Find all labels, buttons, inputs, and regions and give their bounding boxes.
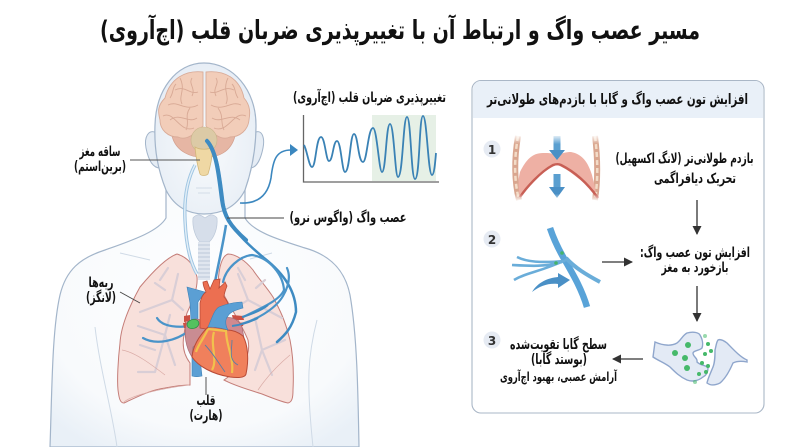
main vagus nerve (143, 140, 296, 342)
step 2 badge (484, 230, 500, 248)
left lung (118, 254, 197, 403)
step 1 text: تحریک دیافراگمی (654, 170, 736, 187)
panel header (473, 81, 763, 118)
step 3 text: آرامش عصبی، بهبود اچ‌آروی (500, 369, 617, 385)
left hemisphere (159, 72, 203, 138)
step 2 badge: 2 (488, 233, 496, 247)
right ear (250, 132, 264, 168)
step 3 text: (بوستد گابا) (531, 350, 587, 368)
midbrain (191, 127, 217, 153)
vagus nerve label: عصب واگ (واگوس نرو) (290, 209, 406, 226)
curved arrow to chart (240, 144, 298, 203)
heart label (190, 377, 222, 424)
step 1 badge (484, 140, 500, 158)
step 3 badge (484, 332, 500, 348)
right hemisphere (206, 72, 250, 138)
step 1 text (616, 150, 754, 187)
brainstem (195, 147, 213, 176)
highlight band (372, 115, 436, 181)
heart (183, 279, 268, 378)
coronary vessels (196, 329, 232, 373)
lungs label: ریه‌ها (88, 275, 114, 291)
heart label: (هارت) (190, 408, 222, 424)
arrow: step 2 text to synapse (696, 286, 698, 321)
lung lobe lines (122, 350, 290, 403)
brainstem label: (برین‌استم) (74, 159, 126, 175)
HRV chart (293, 88, 446, 182)
thyroid and trachea (193, 215, 217, 280)
brainstem label (74, 144, 200, 175)
lung bronchi (138, 268, 285, 375)
chart title: تغییرپذیری ضربان قلب (اچ‌آروی) (293, 88, 446, 106)
arrow: step 1 to step 2 text (696, 200, 698, 234)
torso silhouette (50, 187, 359, 447)
step 2 text: بازخورد به مغز (661, 260, 728, 276)
pale left vagus (185, 165, 197, 274)
icon: diaphragm (510, 134, 605, 202)
axes (304, 115, 439, 182)
right lung (218, 254, 293, 403)
jaw and chin marks (196, 188, 212, 193)
panel frame (472, 80, 764, 413)
arrow: synapse to step 3 text (613, 358, 643, 360)
vena cava (187, 287, 205, 377)
aorta (200, 279, 228, 330)
left ear (145, 132, 160, 168)
wave (304, 116, 436, 179)
pulmonary vein stubs (183, 315, 244, 328)
brain (159, 72, 250, 176)
brain folds (163, 78, 246, 130)
central nerve branch (215, 225, 226, 282)
step 2 text: افزایش تون عصب واگ: (640, 244, 750, 261)
left atrium (185, 319, 208, 357)
step 3 text: سطح گابا تقویت‌شده (510, 335, 607, 353)
green ganglion (186, 318, 200, 330)
lungs label (86, 275, 140, 306)
ventricles (192, 327, 248, 378)
inner arm lines (95, 253, 317, 447)
pulmonary artery (208, 302, 243, 330)
nerve over heart (232, 305, 268, 326)
right atrium (223, 318, 244, 338)
heart label: قلب (196, 393, 216, 409)
brainstem label: ساقه مغز (79, 144, 120, 160)
lungs label: (لانگز) (86, 289, 116, 306)
panel: breathing pathway (472, 80, 764, 413)
icon: nerve branches (512, 228, 600, 307)
head (155, 63, 256, 214)
step 3 badge: 3 (488, 334, 496, 348)
cerebellum (172, 136, 235, 157)
step 3 text (500, 335, 617, 385)
step 1 badge: 1 (488, 143, 496, 157)
arrow: step 2 icon to text (602, 261, 632, 263)
icon: synapse (653, 332, 747, 385)
step 2 text (640, 244, 750, 276)
body illustration (50, 63, 359, 447)
